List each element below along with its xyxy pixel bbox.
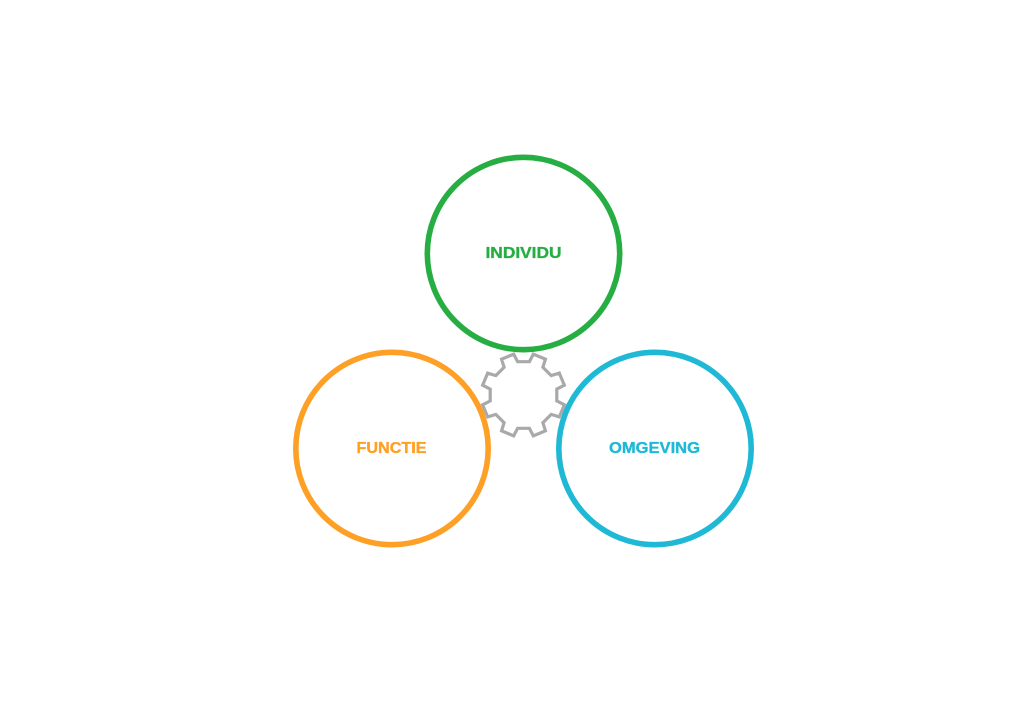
circle: individu — [427, 157, 620, 350]
label: functie: FUNCTIE — [356, 440, 427, 457]
circle: functie — [296, 352, 488, 545]
icon: central gear — [483, 354, 564, 436]
label: individu: INDIVIDU — [486, 245, 562, 262]
circle: omgeving — [559, 352, 751, 545]
label: omgeving: OMGEVING — [609, 440, 700, 457]
